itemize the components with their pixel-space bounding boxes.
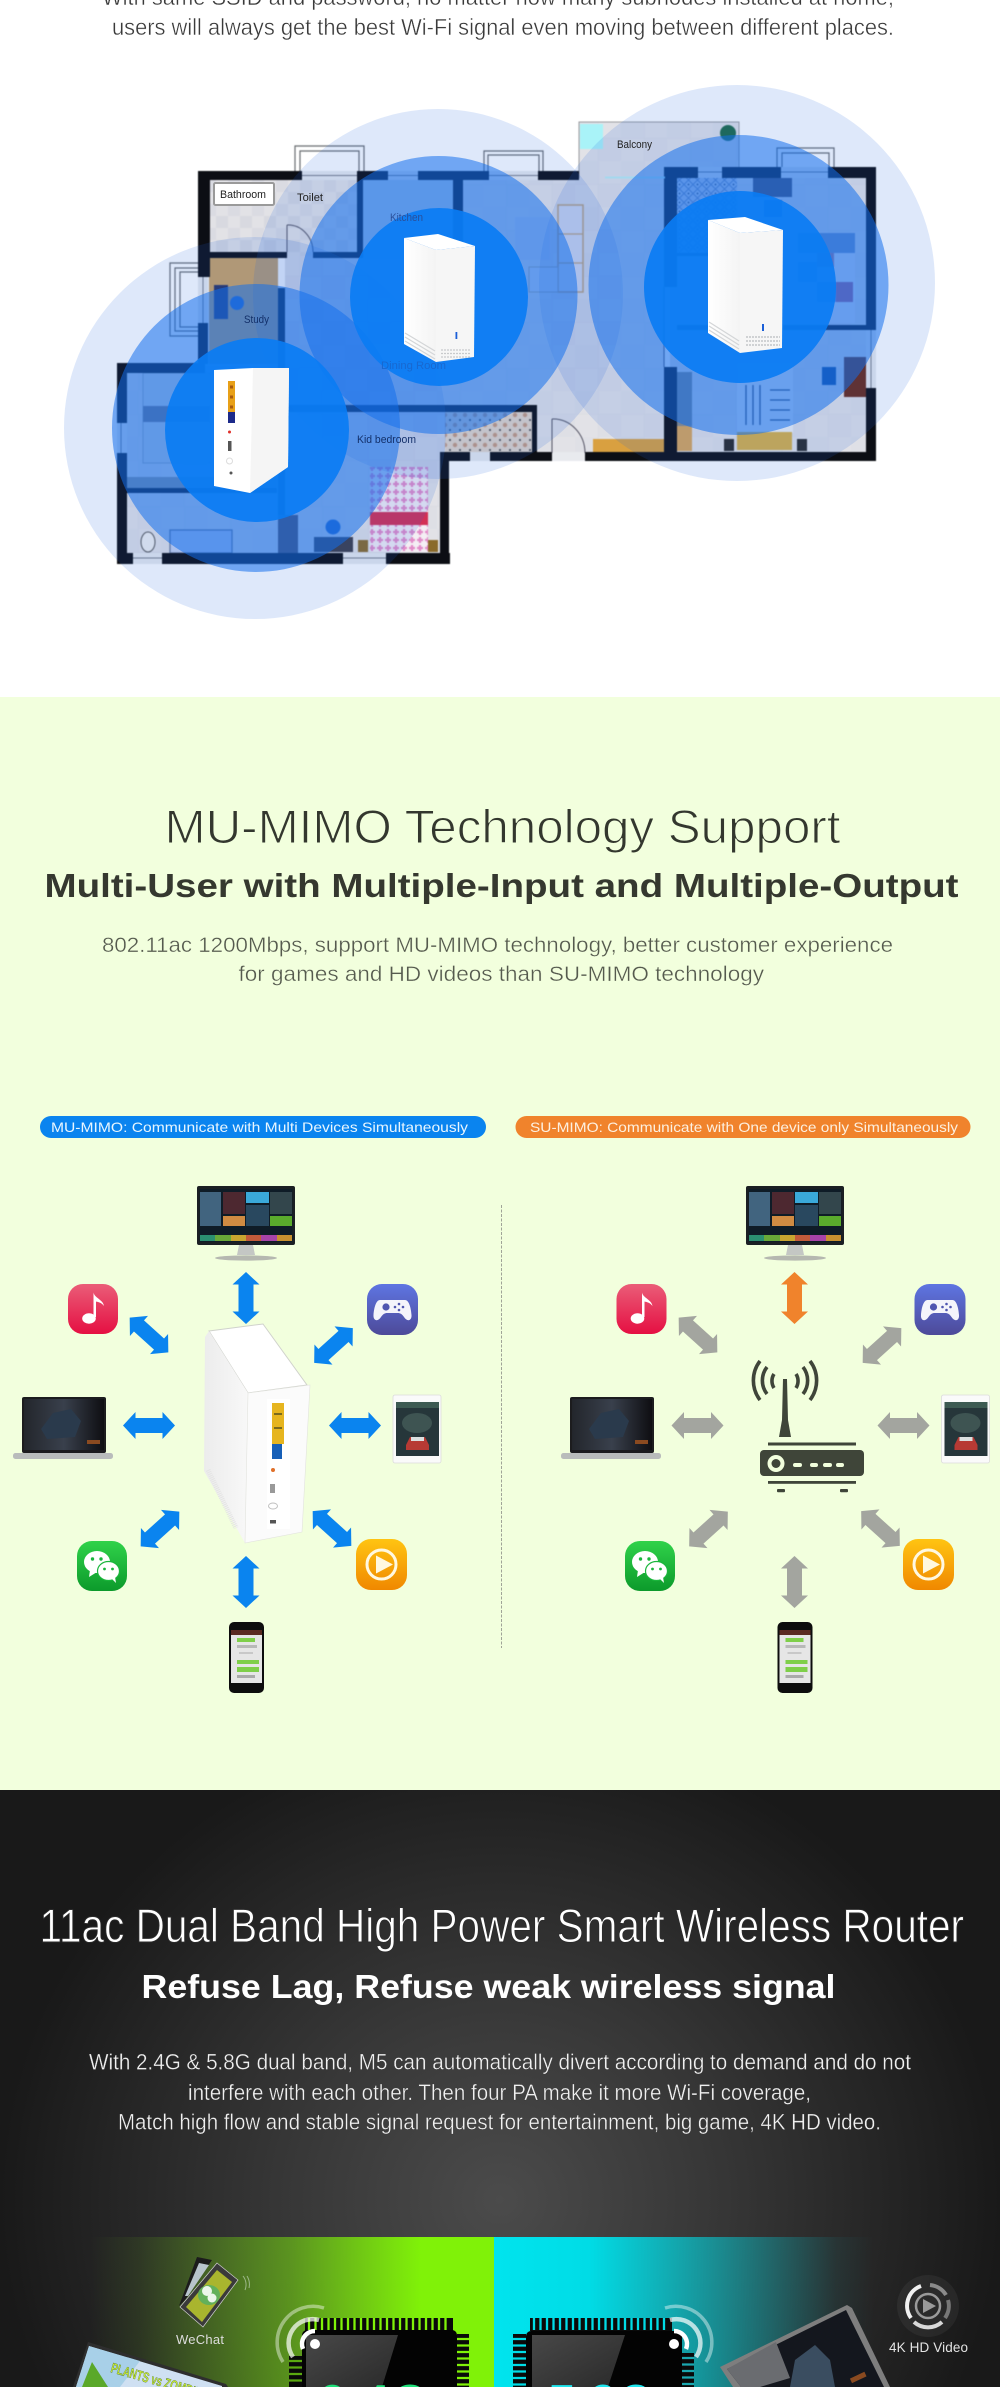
device: monitor xyxy=(197,1186,295,1261)
room labels: Kitchen xyxy=(390,212,423,224)
room labels: Bathroom xyxy=(220,189,266,201)
band: 5.8G cyan xyxy=(494,2237,874,2387)
icon: 5.8G wifi signal xyxy=(665,2306,712,2362)
coverage: outer wifi circles xyxy=(64,85,935,619)
panel: dual band section xyxy=(0,1790,1000,2387)
device: laptop xyxy=(13,1397,113,1459)
text block: dual band description: interfere with each other. Then four PA make it more Wi-Fi coverage, xyxy=(188,2080,811,2105)
band: 2.4G green xyxy=(90,2237,494,2387)
icon: 2.4G wifi signal xyxy=(277,2306,324,2362)
text block: mesh description xyxy=(102,0,894,40)
icon: video play xyxy=(356,1539,407,1590)
pill: MU-MIMO label: MU-MIMO: Communicate with Multi Devices Simultaneously xyxy=(51,1119,468,1135)
label: 4K HD Video: 4K HD Video xyxy=(889,2340,968,2355)
icon: wechat xyxy=(625,1541,675,1591)
heading: refuse lag: Refuse Lag, Refuse weak wireless signal xyxy=(142,1968,836,2005)
image: laptop with game xyxy=(73,2342,228,2387)
icon: conventional router xyxy=(753,1361,864,1492)
icon: music xyxy=(68,1284,118,1334)
room labels: Balcony xyxy=(617,139,652,151)
panel: mesh coverage floor plan xyxy=(0,0,1000,697)
room labels: Toilet xyxy=(297,192,323,204)
text block: MU-MIMO description: 802.11ac 1200Mbps, support MU-MIMO technology, better customer experience xyxy=(102,934,893,957)
device: phone xyxy=(229,1622,264,1693)
icon: game xyxy=(367,1284,418,1335)
device: phone xyxy=(778,1622,812,1693)
icon: phones with WeChat xyxy=(179,2257,249,2327)
pill: SU-MIMO label xyxy=(516,1116,970,1138)
chip: 5.8G xyxy=(513,2318,694,2387)
text block: dual band description: Match high flow and stable signal request for entertainment, big game, 4K HD video. xyxy=(118,2110,881,2134)
arrows: blue bidirectional links xyxy=(121,1272,381,1608)
icon: video play xyxy=(903,1539,954,1590)
room labels xyxy=(214,139,652,446)
coverage: middle wifi circles xyxy=(112,135,888,572)
pill: MU-MIMO label xyxy=(40,1116,486,1138)
router: right mesh node xyxy=(708,217,783,353)
icon: 4K video xyxy=(897,2275,959,2337)
title: MU-MIMO Technology Support: MU-MIMO Technology Support xyxy=(164,800,840,853)
pill: SU-MIMO label: SU-MIMO: Communicate with One device only Simultaneously xyxy=(530,1119,958,1135)
router: MU-MIMO router back view xyxy=(204,1324,310,1543)
image: laptop with game soldiers xyxy=(720,2305,890,2387)
room labels: Kid bedroom xyxy=(357,434,416,446)
text block: MU-MIMO description: for games and HD videos than SU-MIMO technology xyxy=(238,963,765,986)
arrow: orange active link xyxy=(781,1272,808,1324)
panel: MU-MIMO section xyxy=(0,697,1000,1790)
icon: game xyxy=(914,1284,966,1335)
coverage: inner wifi circles xyxy=(165,191,836,522)
text block: MU-MIMO description xyxy=(102,934,893,986)
device: monitor xyxy=(746,1186,844,1261)
icon: wechat xyxy=(77,1541,127,1591)
icon: music xyxy=(616,1284,666,1334)
router: centre mesh node xyxy=(404,234,475,362)
arrows: grey idle links xyxy=(670,1308,930,1608)
router: main node xyxy=(214,368,289,493)
device: tablet xyxy=(393,1395,441,1463)
diagram: MU-MIMO multi-device xyxy=(13,1186,441,1693)
floor plan xyxy=(117,122,876,564)
diagram: SU-MIMO single device xyxy=(561,1186,990,1693)
heading: multi-user subtitle: Multi-User with Multiple-Input and Multiple-Output xyxy=(44,867,959,904)
chip: 2.4G xyxy=(289,2318,469,2387)
device: tablet xyxy=(942,1395,990,1463)
room labels: Dining Room xyxy=(381,360,446,372)
room labels: Study xyxy=(244,314,269,326)
device: laptop xyxy=(561,1397,661,1459)
text block: mesh description: users will always get the best Wi-Fi signal even moving between different places. xyxy=(112,14,894,40)
label: WeChat: WeChat xyxy=(176,2332,224,2347)
text block: dual band description xyxy=(89,2050,912,2134)
text block: dual band description: With 2.4G & 5.8G dual band, M5 can automatically divert according to demand and do not xyxy=(89,2050,912,2074)
walls xyxy=(117,167,876,564)
